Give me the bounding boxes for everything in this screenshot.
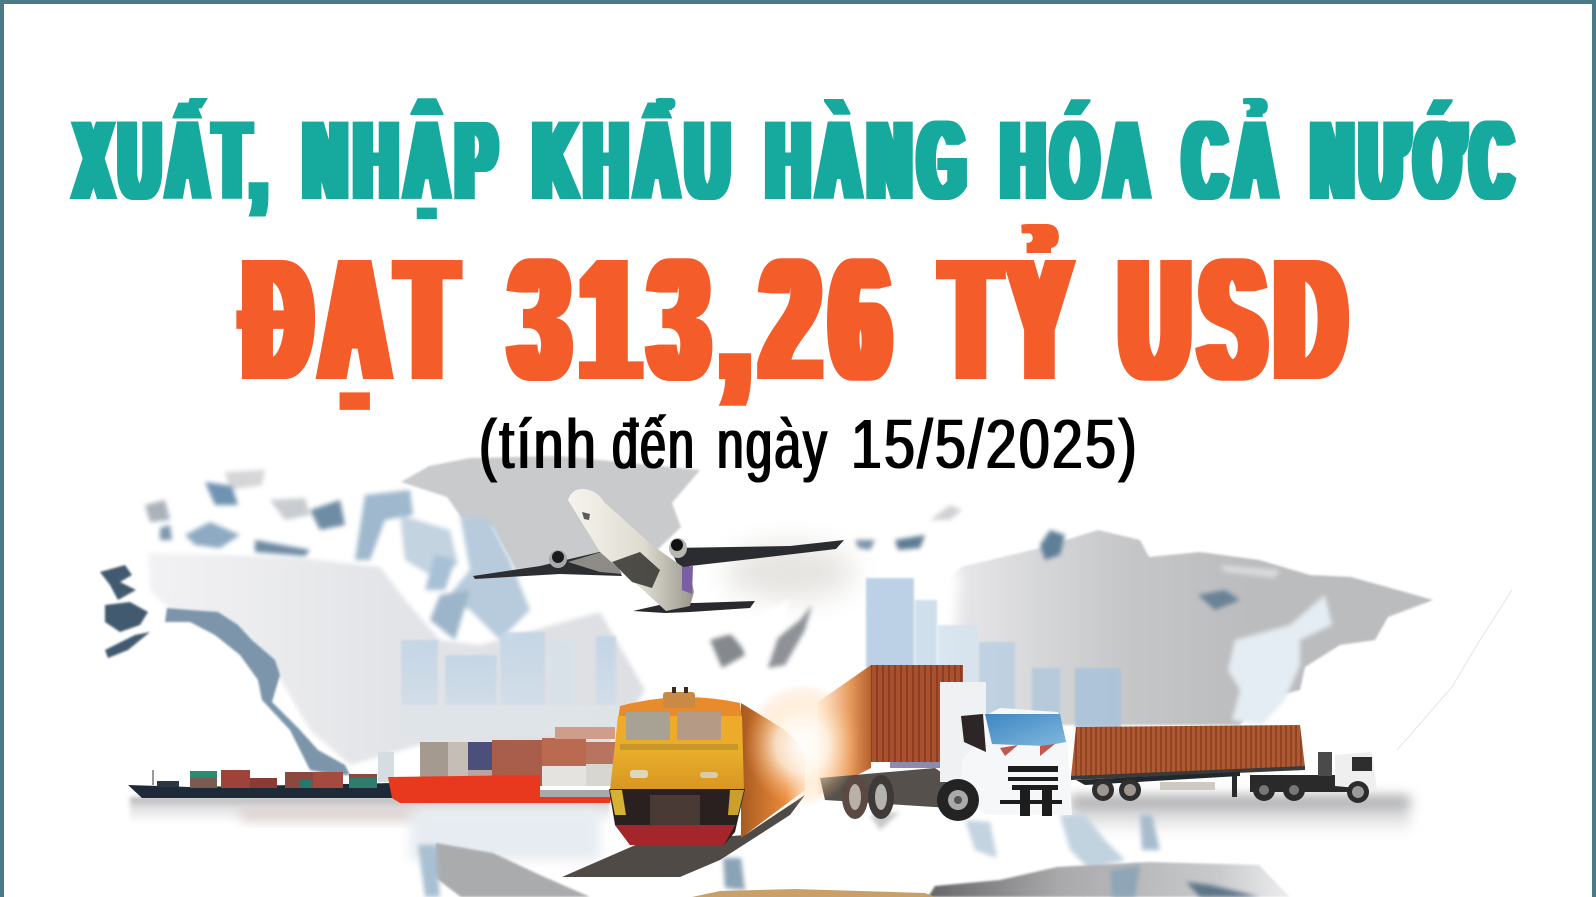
engines: [549, 538, 687, 568]
map: central white europe: [660, 565, 960, 740]
container: [1071, 725, 1305, 777]
subtitle: date: [479, 405, 1139, 483]
trailer frame: [1076, 772, 1240, 785]
train track: [562, 795, 805, 877]
city skyline right: [866, 578, 1121, 728]
title line 1: teal heading: KHẨU: [534, 98, 737, 223]
purple tail fin: [682, 566, 693, 594]
train lower front: [609, 789, 745, 845]
belly shadow: [612, 552, 660, 588]
faint ocean line: [1397, 590, 1512, 750]
ship bridge: [378, 752, 394, 782]
title line 1: teal heading: CẢ: [1184, 98, 1284, 223]
roof device: [663, 692, 695, 708]
tractor cab: [1335, 752, 1377, 790]
front wheel: [937, 779, 979, 821]
ground shadow and reflections: [130, 796, 1410, 860]
right wing: [670, 540, 844, 570]
train roof: [618, 697, 742, 720]
map: greenland: [401, 456, 700, 570]
grille: [1000, 766, 1062, 816]
title line 2: orange total value: [245, 222, 1357, 416]
map: arctic islands and bays: [145, 470, 530, 640]
title line 2: orange total value: TỶ: [944, 222, 1081, 416]
containers: [190, 770, 377, 788]
subtitle: date: 15/5/2025): [851, 405, 1139, 483]
left wing: [473, 550, 622, 579]
cockpit: [582, 512, 590, 520]
bridge: [555, 727, 615, 739]
subtitle: date: đến: [612, 405, 696, 483]
rear truck: [1071, 725, 1377, 803]
wipers: [1000, 744, 1055, 756]
city skyline left: [400, 632, 620, 735]
windshield: [985, 714, 1066, 746]
airplane: [473, 489, 844, 613]
map: western islands: [100, 565, 150, 658]
train side: [741, 703, 805, 838]
title line 1: teal heading: XUẤT,: [75, 98, 274, 223]
subtitle: date: ngày: [717, 405, 829, 483]
cab: [960, 708, 1072, 815]
hull: [128, 783, 392, 798]
subtitle: date: (tính: [479, 405, 598, 483]
title line 2: orange total value: ĐẠT: [245, 222, 467, 416]
front truck: [818, 665, 1072, 821]
trailer wheels: [1092, 779, 1369, 803]
map: north america land: [100, 553, 645, 790]
title line 2: orange total value: USD: [1121, 222, 1357, 416]
map: south america: [418, 843, 745, 897]
train windows: [626, 712, 670, 740]
map: australia blue patches: [1110, 865, 1260, 897]
containers stack: [420, 738, 618, 786]
cab rear panel: [940, 682, 986, 782]
container ship: [128, 752, 394, 798]
container side: [818, 665, 871, 795]
map: eurasia: [930, 530, 1433, 725]
light glare: [744, 683, 860, 807]
map: gray haze near wing: [725, 544, 855, 600]
title line 1: teal heading: HÀNG: [767, 98, 973, 223]
illustration: world map with transport collage: [100, 456, 1512, 897]
title line 2: orange total value: 313,26: [512, 222, 902, 416]
fuselage: [568, 489, 694, 611]
tractor chassis: [1250, 775, 1365, 792]
tan strip bottom: [692, 889, 935, 897]
map: north pacific bays: [855, 505, 1332, 725]
map: australia: [928, 862, 1290, 897]
trailer chassis: [820, 768, 960, 808]
train lights: [630, 770, 648, 778]
train: [609, 687, 805, 845]
tail stabilizer: [633, 601, 755, 613]
train front yellow: [610, 716, 744, 790]
title line 1: teal heading: HÓA: [1002, 98, 1156, 223]
map: dark europe patch: [710, 600, 812, 668]
container front: [871, 665, 963, 762]
title line 1: teal heading: NHẬP: [304, 98, 504, 223]
mirror: [961, 714, 986, 752]
red hull: [388, 775, 612, 803]
map: africa and asia reflections: [870, 812, 1160, 870]
map: alaska and pacific coast: [165, 608, 350, 775]
cargo ship: [388, 727, 618, 803]
title line 1: teal heading: [75, 98, 1520, 223]
rear wheels: [842, 775, 894, 819]
